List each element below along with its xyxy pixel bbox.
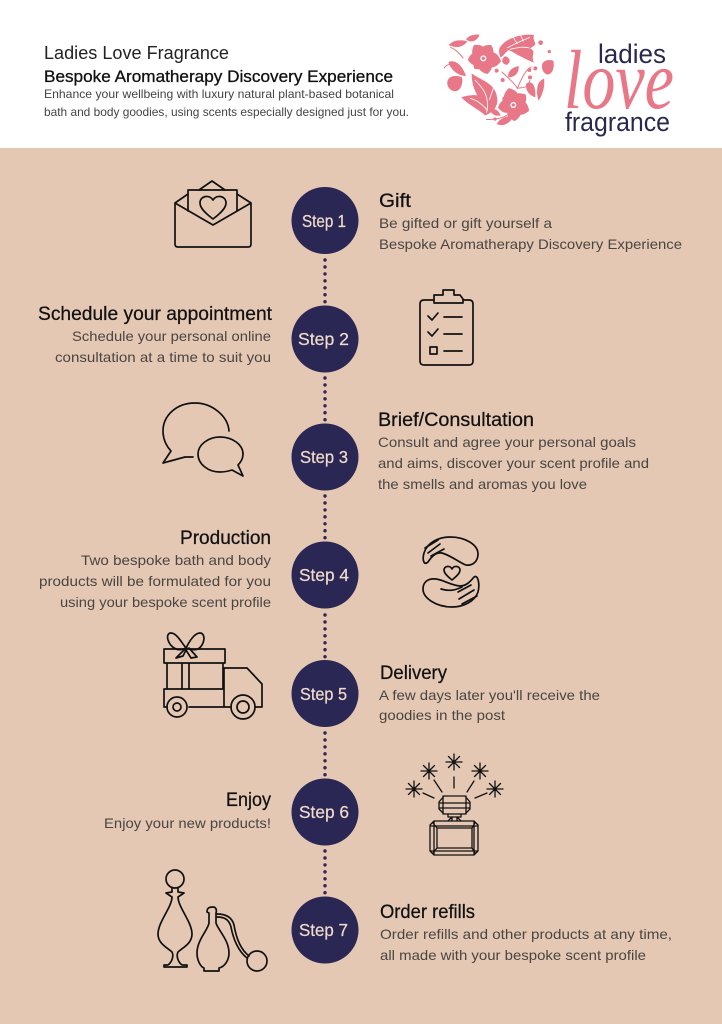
text: schedule your appointment: Schedule your personal online bbox=[72, 329, 271, 344]
icon: checklist clipboard bbox=[420, 290, 473, 365]
text: enjoy: Enjoy bbox=[226, 790, 271, 811]
text: production: products will be formulated for you bbox=[39, 574, 271, 589]
text: delivery: Delivery bbox=[380, 663, 447, 684]
icon: delivery truck with gift bbox=[164, 633, 262, 719]
step badge bbox=[292, 660, 358, 727]
logo: floral heart bbox=[444, 35, 554, 125]
step 5 bbox=[164, 633, 600, 727]
header text block bbox=[44, 42, 409, 119]
text: brief/consultation: and aims, discover your scent profile and bbox=[378, 456, 649, 471]
leaves bbox=[449, 40, 467, 47]
text: order refills bbox=[380, 902, 672, 963]
step 7 bbox=[158, 870, 672, 971]
text: delivery: A few days later you'll receive the bbox=[379, 688, 600, 703]
intro text: Enhance your wellbeing with luxury natural plant-based botanical bbox=[44, 87, 394, 101]
intro text: bath and body goodies, using scents especially designed just for you. bbox=[44, 105, 409, 119]
flower 2 bbox=[497, 86, 532, 122]
step badge: Step 6 bbox=[299, 802, 349, 822]
step badge: Step 1 bbox=[302, 211, 346, 231]
text: production: Production bbox=[180, 528, 271, 549]
title: Ladies Love Fragrance bbox=[44, 42, 229, 63]
text: enjoy: Enjoy your new products! bbox=[104, 816, 271, 831]
step badge bbox=[292, 187, 358, 254]
text: order refills: all made with your bespoke scent profile bbox=[380, 948, 646, 963]
step badge: Step 3 bbox=[300, 447, 348, 467]
berries and stems bbox=[495, 69, 499, 73]
step badge: Step 2 bbox=[298, 329, 349, 349]
step badge: Step 4 bbox=[299, 565, 349, 585]
step badge: Step 7 bbox=[299, 920, 348, 940]
text: order refills: Order refills bbox=[380, 902, 475, 923]
text: gift: Bespoke Aromatherapy Discovery Experience bbox=[379, 237, 682, 252]
step 4 bbox=[39, 528, 479, 610]
text: enjoy bbox=[104, 790, 271, 831]
top feather bbox=[499, 35, 535, 63]
step 2 bbox=[38, 290, 473, 372]
step badge: Step 5 bbox=[300, 684, 347, 704]
logo bbox=[444, 34, 674, 137]
text: brief/consultation: Consult and agree your personal goals bbox=[378, 435, 636, 450]
text: brief/consultation: the smells and aromas you love bbox=[378, 477, 587, 492]
step badge bbox=[292, 306, 358, 372]
subtitle: Bespoke Aromatherapy Discovery Experience bbox=[44, 68, 393, 86]
text: production: using your bespoke scent profile bbox=[60, 595, 271, 610]
step 3 bbox=[163, 403, 649, 492]
icon: perfume bottle with sparkles bbox=[406, 754, 503, 855]
text: brief/consultation: Brief/Consultation bbox=[378, 410, 534, 431]
icon: hands holding heart bbox=[423, 537, 479, 607]
step badge bbox=[292, 778, 358, 846]
roses bbox=[447, 76, 462, 91]
step badge bbox=[292, 424, 358, 490]
logo: wordmark: ladies bbox=[598, 39, 666, 69]
text: gift: Gift bbox=[379, 191, 412, 212]
text: schedule your appointment: Schedule your appointment bbox=[38, 304, 273, 325]
icon: perfume bottles bbox=[158, 870, 267, 971]
text: production bbox=[39, 528, 271, 610]
text: gift: Be gifted or gift yourself a bbox=[379, 216, 552, 231]
text: brief/consultation bbox=[378, 410, 649, 492]
step badge bbox=[292, 896, 358, 964]
flower 1 bbox=[467, 41, 502, 76]
intro text bbox=[44, 87, 409, 119]
step badge bbox=[292, 542, 358, 608]
text: delivery: goodies in the post bbox=[379, 708, 505, 723]
text: production: Two bespoke bath and body bbox=[81, 553, 271, 568]
icon: speech bubbles bbox=[163, 403, 243, 476]
text: schedule your appointment bbox=[38, 304, 273, 365]
text: schedule your appointment: consultation at a time to suit you bbox=[55, 350, 271, 365]
lower feather bbox=[461, 73, 497, 115]
text: order refills: Order refills and other products at any time, bbox=[380, 927, 672, 942]
text: delivery bbox=[379, 663, 600, 723]
logo: wordmark: love bbox=[564, 34, 674, 127]
logo: wordmark: fragrance bbox=[565, 107, 670, 137]
step 1 bbox=[175, 181, 682, 254]
timeline connectors bbox=[323, 260, 327, 893]
step 6 bbox=[104, 754, 503, 855]
icon: envelope with heart bbox=[175, 181, 251, 247]
text: gift bbox=[379, 191, 682, 252]
